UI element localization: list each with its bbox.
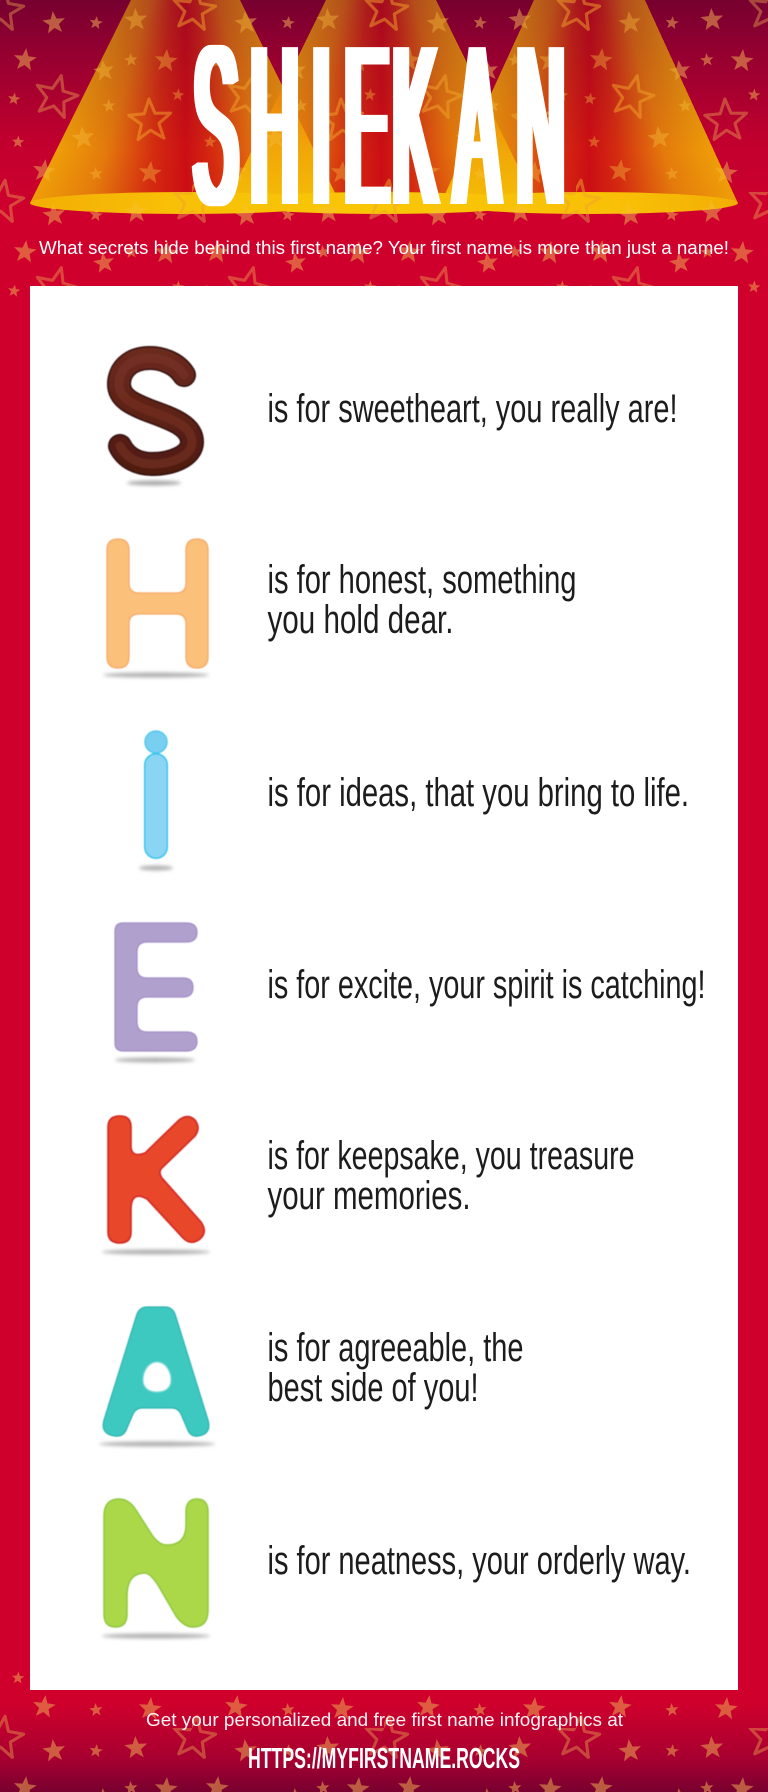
row H: letter icon and phrase xyxy=(103,539,576,678)
icon: letter E xyxy=(115,923,197,1062)
spotlight cone left xyxy=(30,0,282,203)
panel: white content card xyxy=(30,286,738,1690)
phrase A: best side of you! xyxy=(268,1366,478,1410)
phrase K: your memories. xyxy=(268,1174,470,1218)
phrase A: is for agreeable, the xyxy=(268,1326,524,1370)
row I: letter icon and phrase xyxy=(139,731,689,870)
spotlight overlaps, base ellipses and stars on the light xyxy=(30,0,738,258)
icon: letter A xyxy=(99,1307,215,1446)
row E: letter icon and phrase xyxy=(115,923,706,1062)
footer link: HTTPS://MYFIRSTNAME.ROCKS xyxy=(248,1743,520,1775)
row K: letter icon and phrase xyxy=(102,1116,634,1254)
spotlight cone centre xyxy=(239,0,478,193)
icon: letter K xyxy=(102,1116,210,1254)
phrase H: is for honest, something xyxy=(268,558,576,602)
icon: letter N xyxy=(102,1499,210,1638)
row N: letter icon and phrase xyxy=(102,1499,691,1638)
phrase K: is for keepsake, you treasure xyxy=(268,1134,634,1178)
icon: letter H xyxy=(103,539,209,678)
footer text: Get your personalized and free first name infographics at xyxy=(146,1710,623,1730)
phrase H: you hold dear. xyxy=(268,598,454,642)
row A: letter icon and phrase xyxy=(99,1307,524,1446)
icon: letter i xyxy=(139,731,173,870)
title: SHIEKAN xyxy=(194,0,565,253)
spotlight cone right xyxy=(446,0,738,202)
row S: letter icon and phrase xyxy=(119,358,678,486)
icon: letter S xyxy=(119,358,192,486)
subtitle: What secrets hide behind this first name? Your first name is more than just a name! xyxy=(39,238,729,258)
